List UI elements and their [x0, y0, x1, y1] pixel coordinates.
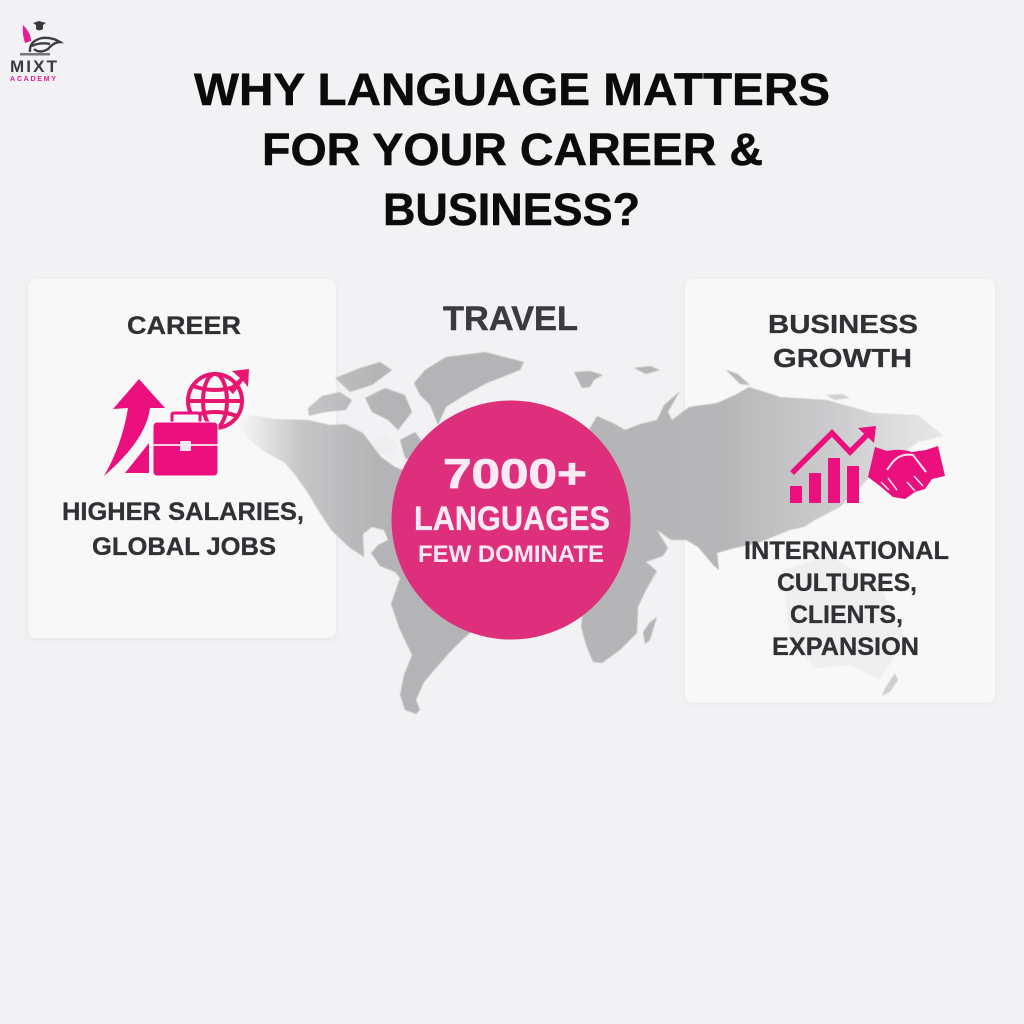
icon: logo graduation cap — [33, 21, 46, 30]
text: business benefits: CLIENTS, — [790, 601, 903, 629]
logo subtitle: ACADEMY — [10, 76, 56, 83]
icon: globe arrow — [228, 369, 249, 394]
stat label: LANGUAGES — [414, 500, 610, 538]
panel: career card — [28, 279, 336, 638]
icon: logo leaf — [30, 38, 60, 52]
heading: travel: TRAVEL — [443, 300, 578, 338]
icon: upward arrow — [104, 379, 165, 476]
heading: business growth: BUSINESS — [768, 309, 918, 339]
icon: logo base — [20, 53, 50, 56]
text: career benefits: HIGHER SALARIES, — [62, 498, 304, 526]
center circle: 7000+ languages — [392, 400, 630, 640]
heading: business growth: GROWTH — [773, 343, 912, 373]
icon: handshake — [868, 446, 945, 499]
stat sublabel: FEW DOMINATE — [418, 541, 604, 568]
text: career benefits: GLOBAL JOBS — [92, 533, 276, 561]
text: business benefits: EXPANSION — [772, 633, 919, 661]
panel: business growth card — [685, 279, 995, 703]
world map — [236, 352, 944, 714]
title: BUSINESS? — [383, 184, 640, 235]
icon: globe — [188, 374, 242, 428]
logo — [10, 21, 60, 83]
icon: logo pink leaf — [23, 25, 31, 43]
stat number: 7000+ — [443, 450, 587, 497]
text: business benefits — [744, 537, 949, 661]
icon: growth chart — [790, 426, 876, 503]
title — [194, 64, 830, 235]
icon: briefcase — [153, 413, 218, 476]
title: FOR YOUR CAREER & — [262, 124, 763, 175]
text: career benefits — [62, 498, 304, 561]
text: business benefits: INTERNATIONAL — [744, 537, 949, 565]
icon: career growth arrow, briefcase and globe — [104, 369, 249, 476]
heading: business growth — [768, 309, 918, 373]
title: WHY LANGUAGE MATTERS — [194, 64, 830, 115]
text: business benefits: CULTURES, — [777, 569, 917, 597]
heading: career: CAREER — [127, 312, 241, 340]
logo wordmark: MIXT — [10, 57, 58, 76]
